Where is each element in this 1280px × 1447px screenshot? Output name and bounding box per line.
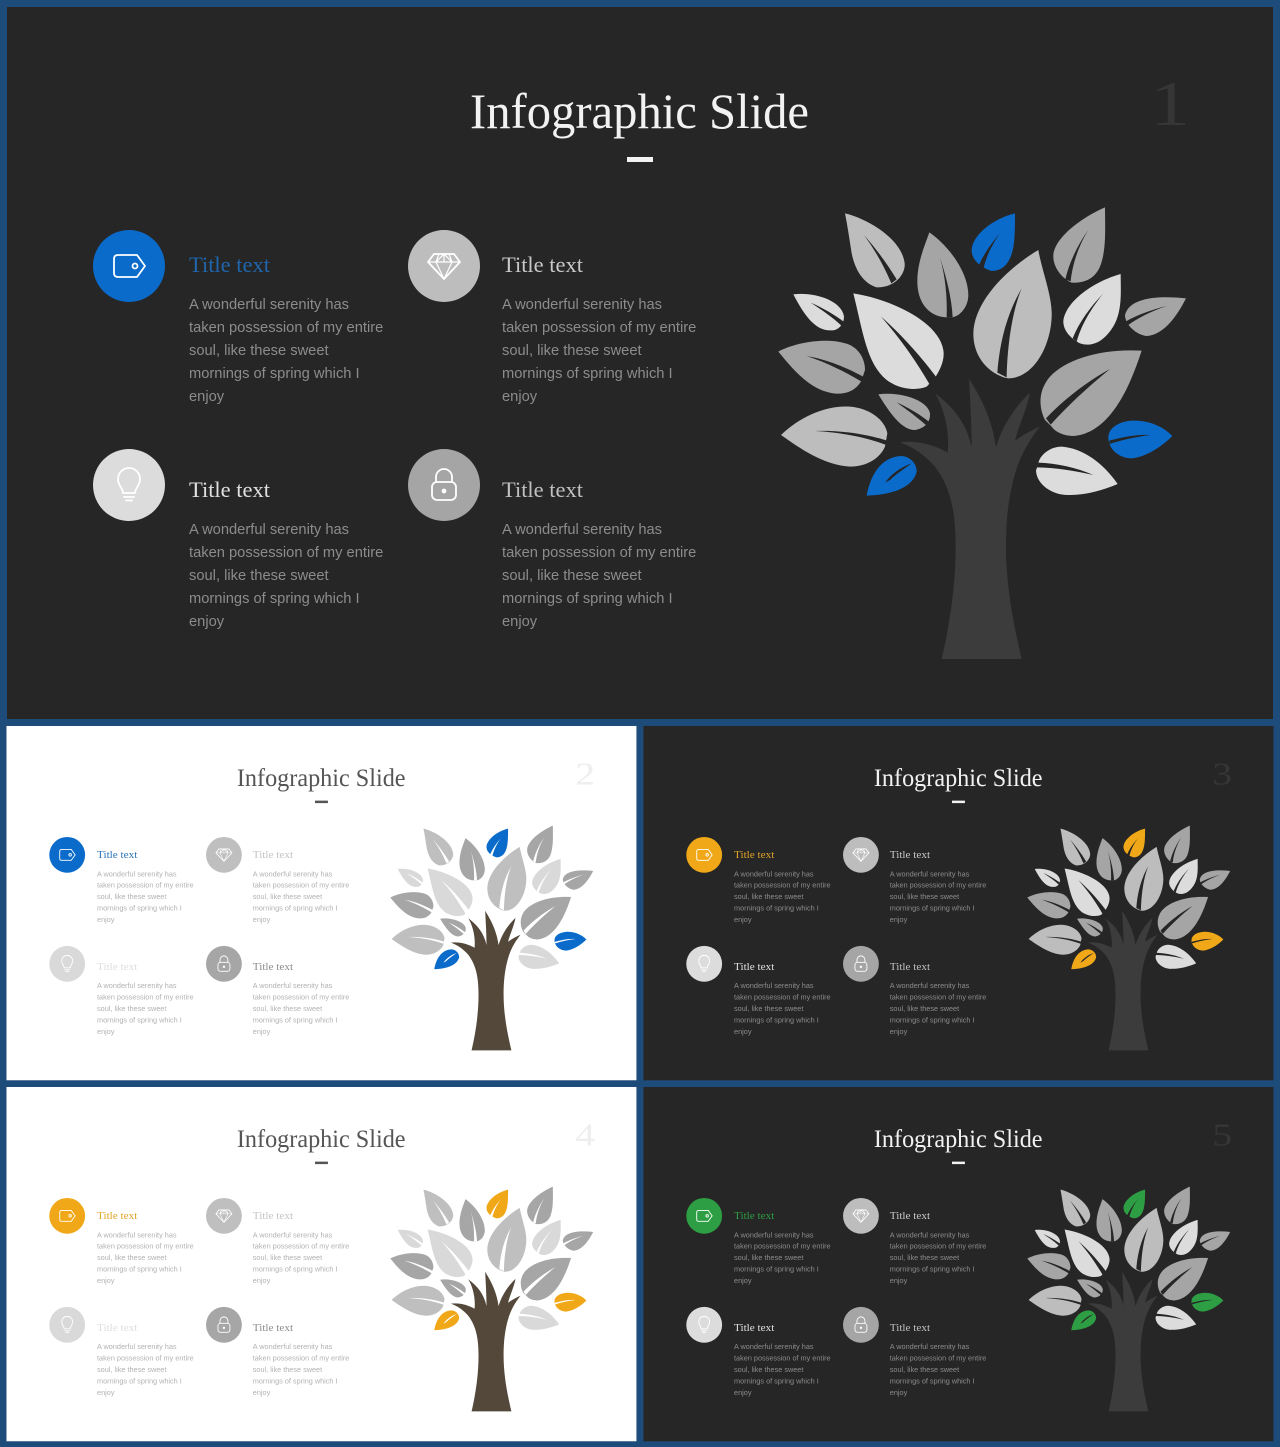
item title: Title text <box>890 1322 930 1334</box>
item text: enjoy <box>189 389 225 405</box>
item text: enjoy <box>502 614 538 630</box>
slide 4: white, amber accent <box>6 1087 636 1441</box>
item text: A wonderful serenity has <box>97 1342 177 1351</box>
item: diamond <box>843 837 986 924</box>
tree illustration <box>390 1187 593 1411</box>
item text: taken possession of my entire <box>97 1242 194 1251</box>
item text: mornings of spring which I <box>890 904 975 913</box>
item text: A wonderful serenity has <box>890 981 970 990</box>
item text: soul, like these sweet <box>97 1253 166 1262</box>
item text: taken possession of my entire <box>253 1354 349 1363</box>
item text: taken possession of my entire <box>502 545 696 561</box>
item text: A wonderful serenity has <box>734 1342 814 1351</box>
item text: soul, like these sweet <box>734 1253 803 1262</box>
item title: Title text <box>97 961 137 973</box>
item text: enjoy <box>502 389 538 405</box>
item text: soul, like these sweet <box>253 892 322 901</box>
icon: light bulb <box>686 1307 722 1343</box>
item: tag <box>686 1198 831 1285</box>
slide 2: white, blue accent <box>6 726 636 1080</box>
item text: taken possession of my entire <box>189 545 383 561</box>
item title: Title text <box>253 961 293 973</box>
item text: soul, like these sweet <box>189 343 329 359</box>
item text: A wonderful serenity has <box>734 1230 814 1239</box>
item text: taken possession of my entire <box>97 1354 194 1363</box>
item text: mornings of spring which I <box>502 366 673 382</box>
item title: Title text <box>890 961 930 973</box>
item text: A wonderful serenity has <box>734 981 814 990</box>
item title: Title text <box>189 477 270 502</box>
title underline <box>315 801 328 803</box>
item text: soul, like these sweet <box>253 1253 322 1262</box>
icon: diamond <box>206 837 242 873</box>
item text: taken possession of my entire <box>502 320 696 336</box>
item text: soul, like these sweet <box>734 1004 803 1013</box>
item text: soul, like these sweet <box>97 1365 166 1374</box>
item text: taken possession of my entire <box>253 993 349 1002</box>
item title: Title text <box>189 252 270 277</box>
item text: enjoy <box>97 1276 115 1285</box>
item title: Title text <box>253 1210 293 1222</box>
slide number: 5 <box>1212 1117 1232 1153</box>
item text: enjoy <box>97 1027 115 1036</box>
item text: soul, like these sweet <box>97 1004 166 1013</box>
item: lock <box>206 1307 349 1397</box>
icon: light bulb <box>49 1307 85 1343</box>
item text: taken possession of my entire <box>734 1242 831 1251</box>
item text: taken possession of my entire <box>189 320 383 336</box>
item: tag <box>93 230 383 405</box>
icon: padlock <box>206 1307 242 1343</box>
tree illustration <box>390 826 593 1050</box>
item text: enjoy <box>253 1276 271 1285</box>
item text: mornings of spring which I <box>97 1265 182 1274</box>
item text: A wonderful serenity has <box>890 869 970 878</box>
item text: mornings of spring which I <box>890 1377 975 1386</box>
title: Infographic Slide <box>237 765 406 792</box>
item text: A wonderful serenity has <box>502 522 662 538</box>
title underline <box>315 1162 328 1164</box>
item: tag <box>49 1198 194 1285</box>
item text: enjoy <box>734 1027 752 1036</box>
item text: mornings of spring which I <box>97 1016 182 1025</box>
item text: mornings of spring which I <box>253 904 338 913</box>
item text: taken possession of my entire <box>253 881 349 890</box>
item text: soul, like these sweet <box>253 1365 322 1374</box>
item text: A wonderful serenity has <box>253 1230 333 1239</box>
item text: mornings of spring which I <box>890 1016 975 1025</box>
slide number: 3 <box>1212 756 1232 792</box>
item text: taken possession of my entire <box>734 993 831 1002</box>
item text: mornings of spring which I <box>97 904 182 913</box>
item: bulb <box>686 946 831 1036</box>
item text: A wonderful serenity has <box>734 869 814 878</box>
item text: enjoy <box>97 1388 115 1397</box>
item: bulb <box>49 946 194 1036</box>
item: lock <box>408 449 696 630</box>
icon: tag <box>686 1198 722 1234</box>
item text: enjoy <box>890 1276 908 1285</box>
item text: soul, like these sweet <box>890 1365 959 1374</box>
item text: taken possession of my entire <box>734 1354 831 1363</box>
title: Infographic Slide <box>874 1126 1043 1153</box>
item text: soul, like these sweet <box>890 1253 959 1262</box>
item text: A wonderful serenity has <box>97 981 177 990</box>
item text: taken possession of my entire <box>890 1354 986 1363</box>
item text: taken possession of my entire <box>97 881 194 890</box>
item text: mornings of spring which I <box>734 1377 819 1386</box>
item title: Title text <box>890 1210 930 1222</box>
item text: soul, like these sweet <box>890 892 959 901</box>
item: bulb <box>93 449 383 630</box>
item: tag <box>686 837 831 924</box>
item text: A wonderful serenity has <box>253 869 333 878</box>
item text: enjoy <box>253 1027 271 1036</box>
item text: taken possession of my entire <box>734 881 831 890</box>
item text: mornings of spring which I <box>189 591 360 607</box>
item text: soul, like these sweet <box>502 343 642 359</box>
icon: diamond <box>206 1198 242 1234</box>
item text: mornings of spring which I <box>734 1265 819 1274</box>
title: Infographic Slide <box>874 765 1043 792</box>
icon: padlock <box>843 946 879 982</box>
item text: mornings of spring which I <box>890 1265 975 1274</box>
item title: Title text <box>97 849 137 861</box>
slide 5: dark, green accent <box>643 1087 1273 1441</box>
tree illustration <box>1027 1187 1230 1411</box>
item: lock <box>843 1307 986 1397</box>
item title: Title text <box>734 961 774 973</box>
item text: A wonderful serenity has <box>890 1230 970 1239</box>
item text: A wonderful serenity has <box>253 1342 333 1351</box>
icon: padlock <box>408 449 480 521</box>
icon: diamond <box>843 837 879 873</box>
item text: enjoy <box>734 1388 752 1397</box>
icon: tag <box>49 837 85 873</box>
icon: diamond <box>843 1198 879 1234</box>
item text: A wonderful serenity has <box>97 869 177 878</box>
title underline <box>627 157 653 162</box>
item text: mornings of spring which I <box>502 591 673 607</box>
icon: light bulb <box>49 946 85 982</box>
item title: Title text <box>253 1322 293 1334</box>
item text: taken possession of my entire <box>890 1242 986 1251</box>
icon: light bulb <box>93 449 165 521</box>
item text: enjoy <box>890 1388 908 1397</box>
item text: mornings of spring which I <box>734 904 819 913</box>
tree illustration <box>778 207 1186 659</box>
item: diamond <box>408 230 696 405</box>
item: lock <box>206 946 349 1036</box>
icon: diamond <box>408 230 480 302</box>
item text: soul, like these sweet <box>890 1004 959 1013</box>
item text: enjoy <box>734 915 752 924</box>
icon: padlock <box>843 1307 879 1343</box>
item text: soul, like these sweet <box>502 568 642 584</box>
item title: Title text <box>97 1210 137 1222</box>
item text: soul, like these sweet <box>97 892 166 901</box>
tree illustration <box>1027 826 1230 1050</box>
title: Infographic Slide <box>470 83 809 139</box>
icon: tag <box>49 1198 85 1234</box>
item text: A wonderful serenity has <box>253 981 333 990</box>
item text: enjoy <box>253 915 271 924</box>
item title: Title text <box>253 849 293 861</box>
item title: Title text <box>734 849 774 861</box>
item text: enjoy <box>890 915 908 924</box>
item text: enjoy <box>189 614 225 630</box>
item text: A wonderful serenity has <box>189 522 349 538</box>
item text: mornings of spring which I <box>97 1377 182 1386</box>
item text: mornings of spring which I <box>253 1265 338 1274</box>
icon: light bulb <box>686 946 722 982</box>
item text: taken possession of my entire <box>890 881 986 890</box>
item text: soul, like these sweet <box>253 1004 322 1013</box>
item title: Title text <box>890 849 930 861</box>
item text: mornings of spring which I <box>189 366 360 382</box>
slide number: 1 <box>1150 68 1190 139</box>
item text: mornings of spring which I <box>253 1016 338 1025</box>
title underline <box>952 1162 965 1164</box>
icon: tag <box>93 230 165 302</box>
item text: mornings of spring which I <box>734 1016 819 1025</box>
title underline <box>952 801 965 803</box>
item text: A wonderful serenity has <box>890 1342 970 1351</box>
item text: taken possession of my entire <box>97 993 194 1002</box>
item text: soul, like these sweet <box>734 892 803 901</box>
slide 1: large dark slide <box>7 7 1273 719</box>
item title: Title text <box>97 1322 137 1334</box>
item title: Title text <box>734 1210 774 1222</box>
item text: A wonderful serenity has <box>97 1230 177 1239</box>
item text: mornings of spring which I <box>253 1377 338 1386</box>
icon: tag <box>686 837 722 873</box>
item text: A wonderful serenity has <box>502 297 662 313</box>
title: Infographic Slide <box>237 1126 406 1153</box>
item: bulb <box>686 1307 831 1397</box>
item text: A wonderful serenity has <box>189 297 349 313</box>
item title: Title text <box>502 252 583 277</box>
item title: Title text <box>734 1322 774 1334</box>
item: lock <box>843 946 986 1036</box>
item: tag <box>49 837 194 924</box>
slide number: 2 <box>575 756 595 792</box>
item: diamond <box>206 1198 349 1285</box>
icon: padlock <box>206 946 242 982</box>
slide number: 4 <box>575 1117 595 1153</box>
item: bulb <box>49 1307 194 1397</box>
slide 3: dark, amber accent <box>643 726 1273 1080</box>
item text: enjoy <box>97 915 115 924</box>
item text: enjoy <box>890 1027 908 1036</box>
item text: soul, like these sweet <box>189 568 329 584</box>
item text: enjoy <box>734 1276 752 1285</box>
item: diamond <box>843 1198 986 1285</box>
item title: Title text <box>502 477 583 502</box>
item: diamond <box>206 837 349 924</box>
item text: taken possession of my entire <box>253 1242 349 1251</box>
item text: soul, like these sweet <box>734 1365 803 1374</box>
item text: taken possession of my entire <box>890 993 986 1002</box>
item text: enjoy <box>253 1388 271 1397</box>
